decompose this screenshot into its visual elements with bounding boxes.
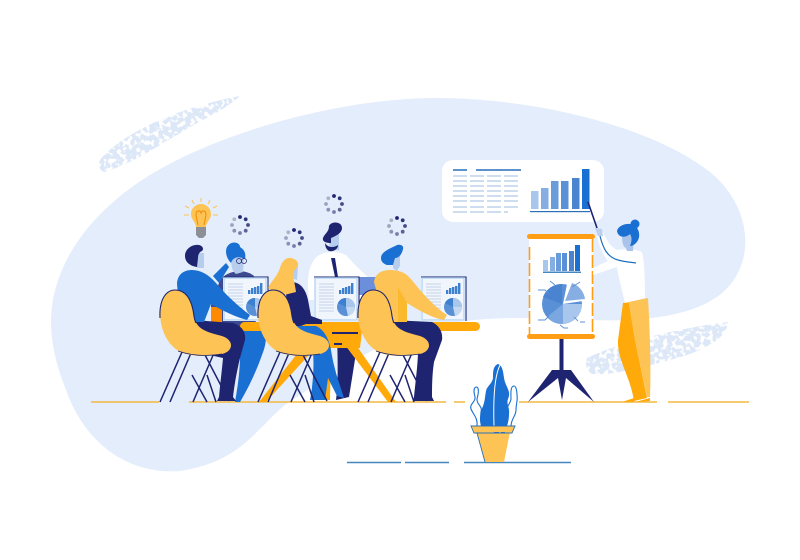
chair: left	[160, 290, 231, 402]
laptop: centre	[314, 277, 359, 321]
face	[231, 258, 244, 274]
presenter	[593, 220, 650, 402]
pot	[477, 432, 510, 462]
board bar chart	[543, 245, 581, 273]
person: front left man in blue	[177, 245, 250, 401]
brush texture: top left	[99, 96, 240, 172]
background: light blue blob	[51, 98, 745, 471]
face	[196, 253, 204, 268]
presenter hair	[617, 220, 640, 246]
leaf vein	[494, 365, 500, 426]
person: front right man in yellow	[374, 245, 447, 401]
chair: middle	[258, 290, 329, 402]
beard	[325, 243, 338, 251]
torso and arm	[177, 270, 250, 322]
filament	[196, 211, 206, 225]
glasses	[236, 258, 246, 264]
presenter shirt	[593, 232, 645, 303]
shirt	[308, 252, 369, 300]
hair	[323, 222, 342, 243]
torso and arm	[374, 270, 447, 322]
face	[328, 232, 339, 250]
legs	[336, 340, 358, 400]
bulb	[191, 204, 211, 227]
presenter face	[622, 234, 634, 251]
orange chair back	[211, 307, 222, 323]
potted plant	[471, 364, 517, 462]
face	[393, 256, 400, 271]
arm shading	[398, 287, 407, 322]
person: woman with yellow hair	[268, 258, 344, 400]
bubble bar chart	[530, 169, 590, 212]
floor line	[91, 401, 749, 403]
face	[291, 264, 298, 280]
body	[211, 271, 256, 330]
bubble text lines	[453, 176, 521, 212]
laptop: left	[223, 277, 268, 321]
loading spinner 3	[324, 194, 344, 214]
chair: right	[358, 290, 429, 402]
board stand	[528, 338, 594, 402]
board pie chart	[538, 281, 585, 328]
presenter hand	[595, 228, 603, 236]
loading spinner 1	[230, 215, 250, 235]
side leaf left	[471, 387, 483, 426]
loading spinner 2	[284, 228, 304, 248]
rays	[184, 198, 218, 215]
torso	[285, 282, 322, 330]
table top	[240, 322, 480, 331]
brush texture: right	[586, 322, 728, 374]
legs	[295, 326, 344, 400]
hair	[226, 242, 245, 263]
table legs	[345, 345, 396, 402]
laptop back, behind third person	[358, 277, 376, 295]
bubble heading lines	[453, 169, 521, 171]
light bulb icon	[184, 198, 218, 238]
base	[196, 227, 206, 238]
hair	[381, 245, 403, 265]
raised arm	[213, 263, 229, 283]
legs	[390, 320, 442, 401]
person: standing man with beard	[308, 222, 369, 400]
presenter arm line	[600, 236, 636, 263]
person: woman with glasses, behind table	[211, 242, 266, 402]
legs	[235, 328, 266, 402]
bottom blue lines	[347, 462, 571, 464]
flip chart board	[527, 234, 595, 402]
presenter trousers	[618, 298, 650, 402]
laptop: right	[421, 277, 466, 321]
tie	[331, 258, 338, 277]
legs	[193, 320, 245, 401]
side leaf right	[504, 386, 517, 426]
table	[240, 322, 480, 402]
speech bubble with chart	[442, 160, 604, 222]
hair	[185, 245, 203, 267]
loading spinner 4	[387, 216, 407, 236]
pointer stick	[588, 202, 597, 228]
hair	[268, 258, 298, 296]
centre leaf	[480, 364, 509, 426]
